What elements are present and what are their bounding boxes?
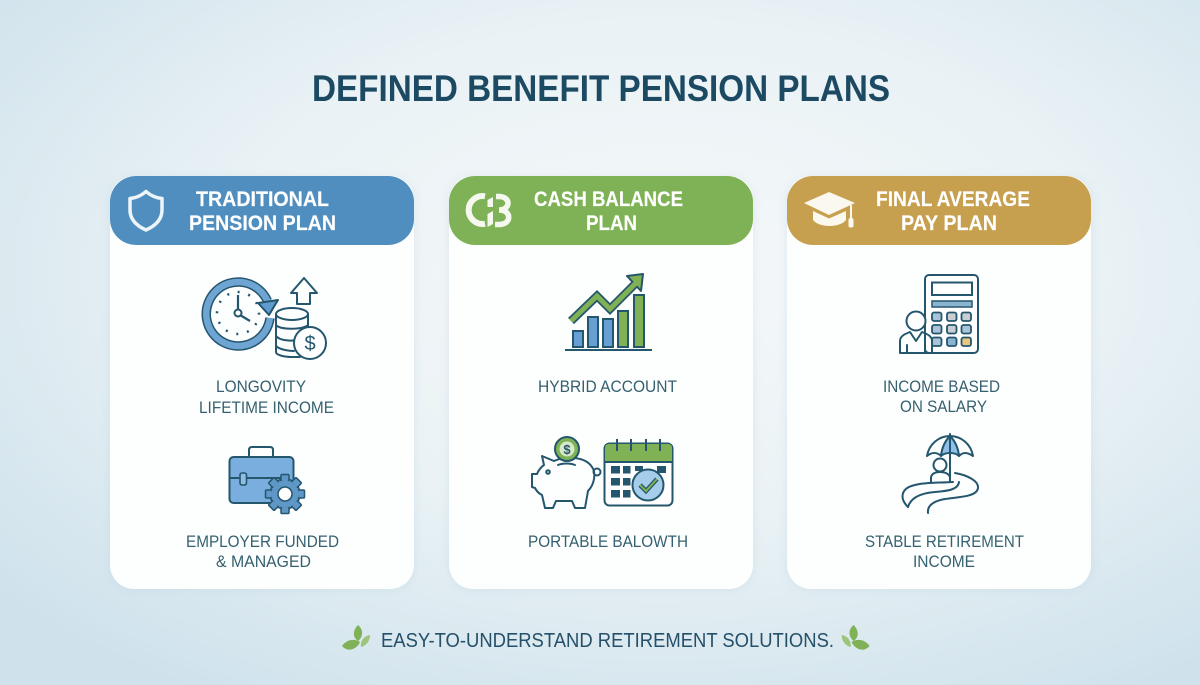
icon: piggy bank with coin: $: [563, 442, 571, 457]
header: cash balance plan: [449, 176, 753, 245]
label: portable balowth: PORTABLE BALOWTH: [528, 532, 688, 551]
header: final average pay plan: [787, 176, 1091, 245]
icon: clock with coins and up arrow: $: [304, 333, 316, 355]
label: employer funded and managed: & MANAGED: [216, 552, 311, 571]
icon: graduation cap: [804, 192, 855, 228]
header: traditional pension plan: PENSION PLAN: [189, 212, 336, 235]
icon: calendar with check: [604, 439, 672, 506]
label: longovity lifetime income: LONGOVITY: [216, 377, 306, 396]
icon: person under umbrella on a path: [903, 434, 978, 513]
title: DEFINED BENEFIT PENSION PLANS: [312, 68, 890, 109]
header: traditional pension plan: TRADITIONAL: [196, 188, 329, 211]
label: income based on salary: ON SALARY: [900, 397, 987, 416]
label: stable retirement income: STABLE RETIREMENT: [865, 532, 1024, 551]
header: cash balance plan: CASH BALANCE: [534, 188, 683, 211]
panel: traditional pension plan: [110, 176, 414, 589]
header: traditional pension plan: [110, 176, 414, 245]
icon: calculator with person: [900, 275, 978, 353]
label: longovity lifetime income: LIFETIME INCOME: [199, 398, 334, 417]
label: employer funded and managed: EMPLOYER FUNDED: [186, 532, 339, 551]
footer tagline: EASY-TO-UNDERSTAND RETIREMENT SOLUTIONS.: [381, 630, 834, 652]
header: cash balance plan: PLAN: [586, 212, 637, 235]
icon: piggy bank with coin: [532, 437, 600, 508]
label: longovity lifetime income: [199, 377, 334, 417]
header: final average pay plan: PAY PLAN: [901, 212, 997, 235]
label: income based on salary: INCOME BASED: [883, 377, 1000, 396]
label: income based on salary: [883, 377, 1000, 416]
panel: cash balance plan: [449, 176, 753, 589]
icon: right leaves: [842, 625, 870, 650]
label: stable retirement income: [865, 532, 1024, 571]
header: final average pay plan: FINAL AVERAGE: [876, 188, 1030, 211]
icon: CB monogram: [469, 196, 509, 227]
panel: final average pay plan: [787, 176, 1091, 589]
label: stable retirement income: INCOME: [913, 552, 975, 571]
icon: growth bar chart with arrow: [565, 274, 652, 350]
icon: clock with coins and up arrow: [206, 278, 326, 359]
icon: left leaves: [342, 625, 370, 650]
icon: shield: [130, 192, 162, 230]
label: hybrid account: HYBRID ACCOUNT: [538, 377, 677, 396]
label: employer funded and managed: [186, 532, 339, 571]
icon: briefcase with gear: [230, 447, 304, 514]
